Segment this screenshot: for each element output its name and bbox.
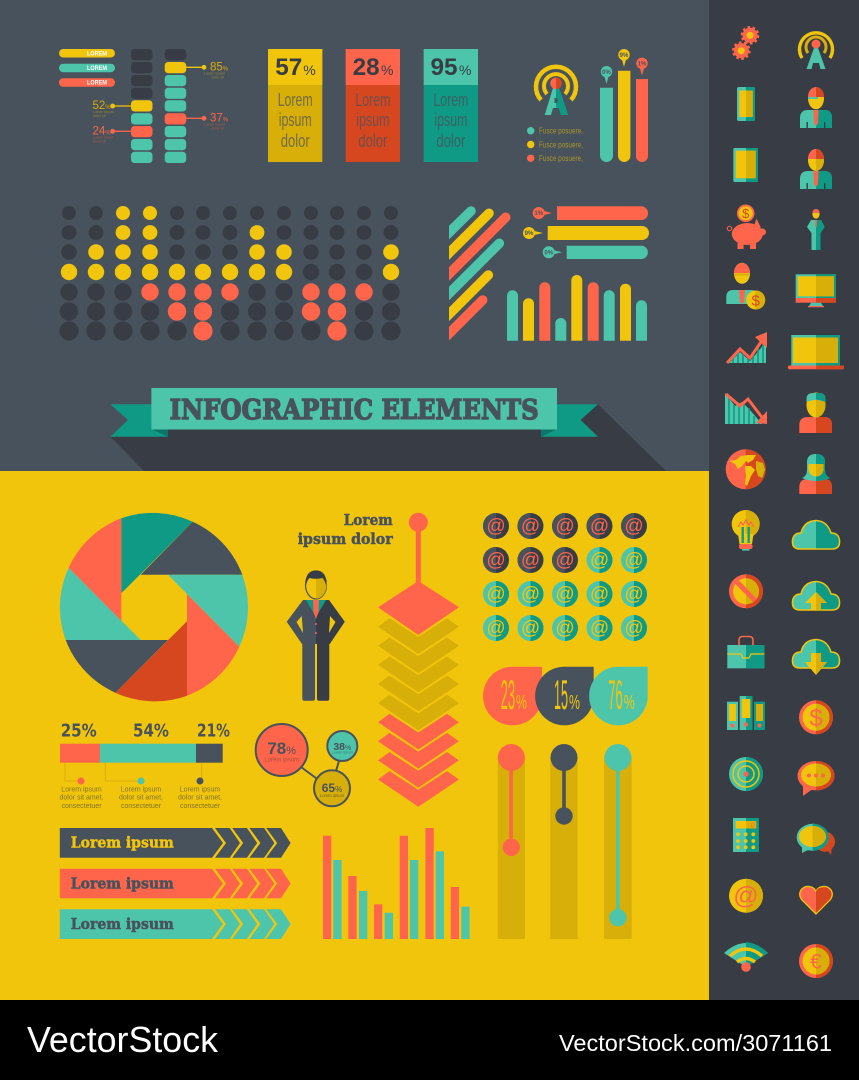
chart: tube bars with pins: 9% xyxy=(620,53,629,59)
bubble network: 65% xyxy=(322,781,342,795)
arrow banner teal xyxy=(60,909,291,939)
percentage drops: 15 xyxy=(554,671,568,718)
icon: cloud xyxy=(792,520,840,549)
icon: standing man xyxy=(807,209,824,250)
at-sign icon array: @ xyxy=(521,584,540,605)
ribbon fold left xyxy=(151,429,168,437)
horizontal pin bars: 0% xyxy=(544,250,554,256)
chart: tube bars with pins: 1% xyxy=(638,62,647,68)
icon: binders xyxy=(727,696,765,730)
legend: tower: Fusce posuere, xyxy=(539,126,583,136)
card 28%: ipsum xyxy=(356,110,389,130)
at-sign icon array: @ xyxy=(555,516,575,537)
panel: icon sidebar xyxy=(709,0,859,1000)
legend pills: LOREM xyxy=(87,51,107,57)
at-sign icon array: @ xyxy=(590,516,609,537)
card 57%: dolor xyxy=(281,131,310,151)
icon: globe xyxy=(726,449,766,489)
icon: chat bubbles xyxy=(797,824,835,855)
stacked percentage bar: 21% xyxy=(197,721,230,742)
icon: piggy bank: $ xyxy=(742,206,750,221)
shirt and tie xyxy=(306,600,326,617)
rounded bar chart xyxy=(507,275,647,341)
level column 1 xyxy=(131,49,152,163)
icon: briefcase xyxy=(727,636,764,668)
at-sign icon array: @ xyxy=(521,618,540,639)
stacked percentage bar xyxy=(60,721,230,810)
icon: rising chart xyxy=(727,332,767,363)
icon: dollar coin xyxy=(799,700,833,734)
icon: monitor xyxy=(796,274,836,307)
stacked percentage bar: 54% xyxy=(133,721,169,742)
horizontal pin bars: 9% xyxy=(525,231,534,237)
callout 52%: 52% xyxy=(92,100,111,112)
card 95%: Lorem xyxy=(433,90,468,110)
at-sign icon array: @ xyxy=(555,550,575,571)
arrow banner teal: Lorem ipsum xyxy=(71,915,174,933)
icon: calculator: 0 xyxy=(751,823,755,830)
card 57%: 57 xyxy=(275,54,302,81)
legend: tower: Fusce posuere, xyxy=(539,139,583,149)
callout 52%: Lorem ipsum xyxy=(93,110,114,114)
title ribbon xyxy=(110,388,666,471)
icon: euro coin: € xyxy=(810,950,822,974)
card 28% xyxy=(346,49,400,162)
callout 24% xyxy=(92,125,131,143)
card 95%: % xyxy=(459,62,471,78)
at-sign icon array xyxy=(483,513,647,641)
callout 37%: dolor sit xyxy=(211,126,224,130)
panel: yellow lower background xyxy=(0,471,709,1000)
legend pills: LOREM xyxy=(87,66,107,72)
ribbon fold right xyxy=(541,429,557,437)
percentage drops: 76 xyxy=(608,671,623,718)
legend pills: LOREM xyxy=(87,81,107,87)
callout 52%: dolor sit xyxy=(93,114,106,118)
icon: smartphone xyxy=(737,87,755,121)
icon: speech bubble xyxy=(798,761,835,796)
heading: lorem ipsum dolor: Lorem xyxy=(344,511,393,529)
callout 37%: Lorem ipsum xyxy=(204,122,225,126)
callout 52% xyxy=(92,100,131,118)
callout 85% xyxy=(186,61,229,80)
top diamond xyxy=(378,581,459,635)
row 6 xyxy=(60,302,400,321)
stacked percentage bar: Lorem ipsum xyxy=(121,786,161,794)
icon: gears xyxy=(733,27,758,59)
card 95% xyxy=(424,49,478,162)
stacked percentage bar: dolor sit amet, xyxy=(119,795,163,802)
bubble network: 78% xyxy=(267,739,296,758)
card 28%: % xyxy=(381,62,393,78)
at-sign icon array: @ xyxy=(486,618,506,639)
at-sign icon array: @ xyxy=(590,618,609,639)
icon: broadcast tower xyxy=(800,33,833,69)
chevrons xyxy=(378,618,459,654)
card 95%: ipsum xyxy=(434,110,467,130)
stacked percentage bar: dolor sit amet, xyxy=(178,795,222,802)
arrow banner coral xyxy=(60,869,291,898)
icon: woman xyxy=(799,454,832,494)
card 57%: % xyxy=(303,62,316,78)
stacked percentage bar: Lorem ipsum xyxy=(61,786,102,794)
card 95%: dolor xyxy=(436,131,465,151)
card 28%: dolor xyxy=(358,131,387,151)
icon: radio tower xyxy=(536,67,576,115)
at-sign icon array: @ xyxy=(624,618,644,639)
bubble network: Lorem ipsum xyxy=(264,758,299,764)
stacked diamond chevrons xyxy=(378,513,459,807)
percentage drops xyxy=(483,667,648,725)
ribbon main band xyxy=(151,388,557,430)
bubble network: Lorem ipsum xyxy=(332,751,353,755)
row 1 xyxy=(62,206,398,220)
callout 85%: dolor sit xyxy=(211,76,224,80)
stacked percentage bar: 25% xyxy=(61,721,97,742)
icon: cloud download xyxy=(792,640,840,675)
at-sign icon array: @ xyxy=(486,550,506,571)
arrow banner dark xyxy=(60,828,291,858)
icon: at-sign coin: @ xyxy=(733,882,759,910)
icon: wifi xyxy=(724,942,768,972)
chart: tube bars with pins: 0% xyxy=(602,70,612,76)
chart: tube bars with pins xyxy=(600,49,648,162)
at-sign icon array: @ xyxy=(590,550,609,571)
callout 85%: Lorem ipsum xyxy=(204,72,225,76)
at-sign icon array: @ xyxy=(624,550,644,571)
jacket xyxy=(287,600,345,644)
level column 2 xyxy=(165,49,186,163)
long shadow xyxy=(110,404,666,471)
icon: dollar coin: $ xyxy=(809,705,823,732)
legend pills xyxy=(59,49,115,87)
stacked percentage bar: consectetuer xyxy=(61,803,102,810)
ribbon tail right xyxy=(541,404,598,437)
callout 37% xyxy=(186,112,229,130)
icon: target xyxy=(729,757,763,791)
icon: man with coin xyxy=(726,263,765,310)
row 2 xyxy=(62,225,398,240)
percentage drops: 23 xyxy=(501,671,515,718)
vertical sliders xyxy=(498,744,632,939)
percentage drops: % xyxy=(569,692,580,714)
card 57%: ipsum xyxy=(279,110,312,130)
at-sign icon array: @ xyxy=(555,618,575,639)
horizontal pin bars xyxy=(523,206,649,259)
dot matrix chart xyxy=(59,206,401,341)
icon: calculator xyxy=(733,818,759,852)
title: INFOGRAPHIC ELEMENTS xyxy=(170,395,539,426)
at-sign icon array: @ xyxy=(521,550,540,571)
icon: light bulb xyxy=(732,510,760,551)
card 95%: 95 xyxy=(430,54,458,81)
icon: euro coin xyxy=(799,944,833,978)
row 5 xyxy=(60,283,400,301)
icon: falling chart xyxy=(725,393,767,424)
bubble network: Lorem ipsum xyxy=(320,793,345,798)
watermark footer band xyxy=(0,1000,859,1080)
head xyxy=(306,571,326,599)
callout 24%: 24% xyxy=(92,125,111,137)
row 3 xyxy=(61,244,399,260)
icon: man with coin: $ xyxy=(752,292,761,310)
watermark url text: VectorStock.com/3071161 xyxy=(559,1030,832,1056)
icon: man in suit xyxy=(800,149,832,189)
icon: person short hair xyxy=(799,392,832,433)
grouped bar chart xyxy=(323,828,470,939)
at-sign icon array: @ xyxy=(486,584,506,605)
stacked level chart xyxy=(59,49,229,163)
at-sign icon array: @ xyxy=(555,584,575,605)
stacked percentage bar: Lorem ipsum xyxy=(180,786,220,794)
icon: prohibited sign xyxy=(729,574,763,608)
at-sign icon array: @ xyxy=(624,516,644,537)
at-sign icon array: @ xyxy=(590,584,609,605)
heading: lorem ipsum dolor: ipsum dolor xyxy=(298,530,394,548)
businessman figure xyxy=(287,570,345,701)
heading: lorem ipsum dolor xyxy=(298,511,394,548)
horizontal pin bars: 1% xyxy=(534,211,544,217)
watermark logo text: VectorStock xyxy=(27,1019,219,1060)
arrow banner coral: Lorem ipsum xyxy=(71,874,174,892)
at-sign icon array: @ xyxy=(521,516,540,537)
legend: tower: Fusce posuere, xyxy=(539,153,583,163)
percentage drops: % xyxy=(516,692,527,714)
stacked percentage bar: dolor sit amet, xyxy=(60,795,104,802)
bubble network: 38% xyxy=(333,741,351,753)
stacked percentage bar: consectetuer xyxy=(180,803,221,810)
ribbon tail left xyxy=(110,404,168,437)
percentage drops: % xyxy=(624,692,635,714)
card 57%: Lorem xyxy=(278,90,313,110)
icon: tablet xyxy=(733,148,758,182)
card 28%: Lorem xyxy=(355,90,390,110)
at-sign icon array: @ xyxy=(624,584,644,605)
diagonal stripes xyxy=(440,211,506,343)
icon: cloud upload xyxy=(792,582,840,610)
callout 24%: Lorem ipsum xyxy=(93,135,114,139)
legend: tower xyxy=(527,126,583,163)
at-sign icon array: @ xyxy=(486,516,506,537)
card 28%: 28 xyxy=(353,54,380,81)
bubble network xyxy=(256,724,357,806)
callout 37%: 37% xyxy=(210,112,229,124)
icon: laptop xyxy=(788,335,844,369)
icon: piggy bank xyxy=(727,204,766,249)
panel: dark upper background xyxy=(0,0,709,471)
icon: heart xyxy=(800,886,832,914)
arrow banner dark: Lorem ipsum xyxy=(71,834,174,852)
stacked percentage bar: consectetuer xyxy=(121,803,162,810)
row 4 xyxy=(61,264,399,280)
callout 24%: dolor sit xyxy=(93,139,106,143)
callout 85%: 85% xyxy=(210,61,229,73)
aperture pie chart xyxy=(60,513,248,701)
card 57% xyxy=(268,49,322,162)
icon: at-sign coin xyxy=(729,879,763,913)
arm gaps xyxy=(296,616,303,633)
pin xyxy=(409,513,428,532)
trousers xyxy=(302,644,315,701)
icon: man with headset xyxy=(800,87,832,128)
row 7 xyxy=(59,321,401,341)
